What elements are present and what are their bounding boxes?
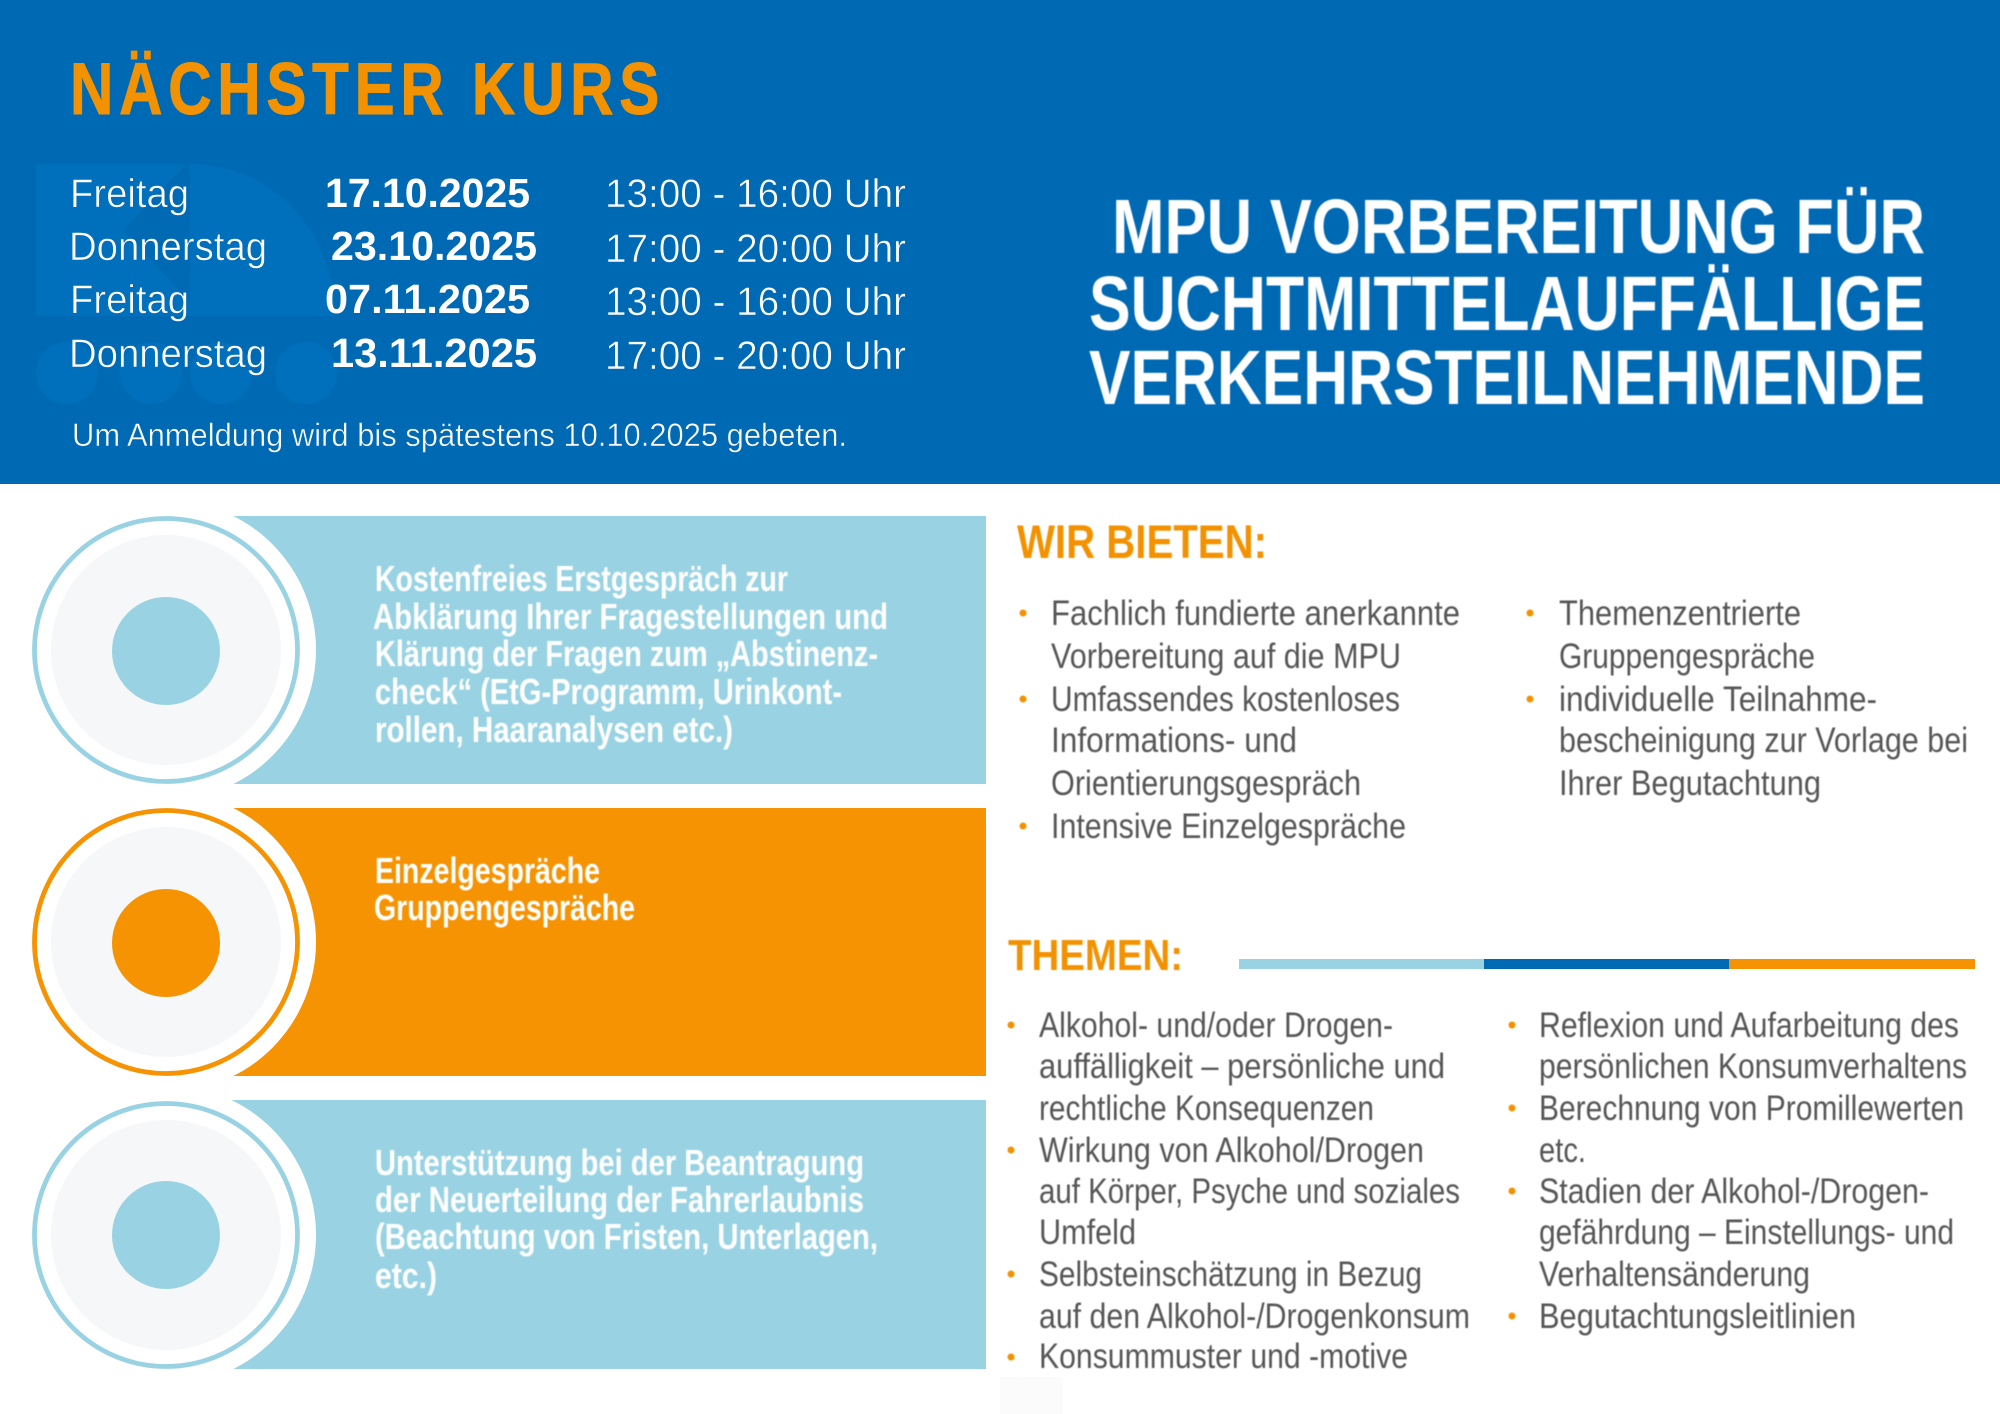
course dates table [69,170,906,378]
list: themen right column: Verhaltensänderung [1539,1255,1810,1294]
icon: teal target circle [16,1085,316,1385]
band 2 text: Einzelgespräche [375,850,600,891]
date row 2: 23.10.2025 [331,223,537,269]
band 3 text: etc.) [375,1255,437,1296]
list: wir bieten right column [1526,594,1968,803]
list: themen left column: Konsummuster und -motive [1039,1337,1408,1376]
band 1 text: check“ (EtG-Programm, Urinkont- [375,671,842,712]
list: wir bieten left column: Orientierungsgespräch [1051,764,1361,803]
list: themen left column: rechtliche Konsequenzen [1039,1089,1374,1128]
date row 3 [70,276,906,324]
date row 1: 17.10.2025 [325,170,530,216]
panel: band 1 free consultation [16,500,986,800]
heading: themen: THEMEN: [1008,931,1183,980]
date row 2 [69,223,906,271]
date row 1: Freitag [70,172,189,216]
list: wir bieten right column: individuelle Teilnahme- [1559,680,1877,719]
list: wir bieten left column: Fachlich fundierte anerkannte [1051,594,1460,633]
date row 2: Donnerstag [69,225,267,269]
band 1 text: Abklärung Ihrer Fragestellungen und [373,596,888,637]
date row 4: 17:00 - 20:00 Uhr [605,334,906,378]
main title [1089,184,1925,421]
list: themen right column: etc. [1539,1131,1586,1170]
list: wir bieten left column: Vorbereitung auf die MPU [1051,637,1401,676]
panel: header [0,0,2000,484]
date row 1: 13:00 - 16:00 Uhr [605,172,906,216]
list: themen left column: auf den Alkohol-/Drogenkonsum [1039,1297,1470,1336]
band 3 text: der Neuerteilung der Fahrerlaubnis [375,1179,864,1220]
date row 2: 17:00 - 20:00 Uhr [605,227,906,271]
band 1 text: Kostenfreies Erstgespräch zur [375,558,788,599]
band 3 text [375,1142,878,1296]
heading: wir bieten: WIR BIETEN: [1017,515,1267,568]
date row 4: Donnerstag [69,332,267,376]
date row 4 [69,330,906,378]
list: themen left column: auf Körper, Psyche und soziales [1039,1172,1460,1211]
list: themen left column [1008,1006,1470,1376]
list: themen left column: Umfeld [1039,1213,1136,1252]
watermark logo [36,164,337,404]
list: themen left column: auffälligkeit – persönliche und [1039,1047,1445,1086]
band 2 text [374,850,635,928]
icon: orange target circle [16,792,316,1092]
band 3 text: Unterstützung bei der Beantragung [375,1142,864,1183]
panel: band 3 licence support [16,1085,986,1385]
panel: band 2 conversations [16,792,986,1092]
icon: teal target circle [16,500,316,800]
heading: next course: NÄCHSTER KURS [70,49,665,130]
list: wir bieten left column: Intensive Einzelgespräche [1051,807,1406,846]
list: themen right column: Stadien der Alkohol-/Drogen- [1539,1172,1929,1211]
list: wir bieten left column: Umfassendes kostenloses [1051,680,1400,719]
band 1 text: rollen, Haaranalysen etc.) [375,709,733,750]
band 1 text [373,558,888,750]
list: themen left column: Wirkung von Alkohol/Drogen [1039,1131,1424,1170]
list: wir bieten right column: Ihrer Begutachtung [1559,764,1821,803]
band 1 text: Klärung der Fragen zum „Abstinenz- [375,633,878,674]
date row 3: Freitag [70,278,189,322]
date row 1 [70,170,906,216]
date row 4: 13.11.2025 [331,330,537,376]
list: wir bieten right column: Gruppengespräche [1559,637,1815,676]
band 3 text: (Beachtung von Fristen, Unterlagen, [375,1216,878,1257]
band 2 text: Gruppengespräche [374,887,635,928]
list: wir bieten left column: Informations- und [1051,721,1297,760]
date row 3: 07.11.2025 [325,276,530,322]
registration note: Um Anmeldung wird bis spätestens 10.10.2025 gebeten. [72,417,847,453]
list: wir bieten right column: Themenzentrierte [1559,594,1801,633]
tricolour bar [1239,959,1975,969]
list: themen left column: Selbsteinschätzung in Bezug [1039,1255,1422,1294]
list: wir bieten left column [1020,594,1460,846]
list: themen right column: Begutachtungsleitlinien [1539,1297,1856,1336]
list: themen right column [1508,1006,1967,1336]
date row 3: 13:00 - 16:00 Uhr [605,280,906,324]
list: themen left column: Alkohol- und/oder Drogen- [1039,1006,1393,1045]
